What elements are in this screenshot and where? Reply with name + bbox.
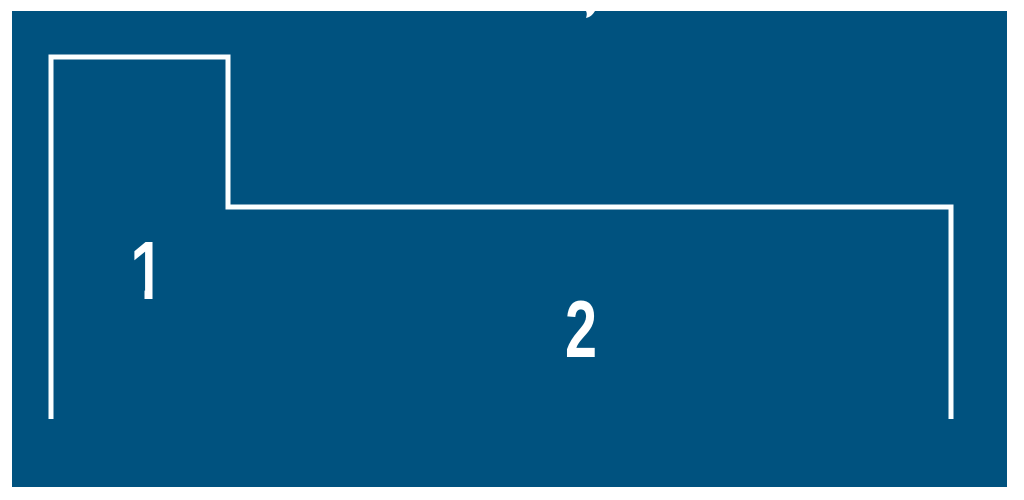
clipped comma at top edge — [586, 11, 595, 18]
label: region 1: 1 — [130, 224, 166, 317]
label: region 2: 2 — [565, 283, 597, 374]
stepped outline dividing regions 1 and 2 — [51, 57, 951, 419]
